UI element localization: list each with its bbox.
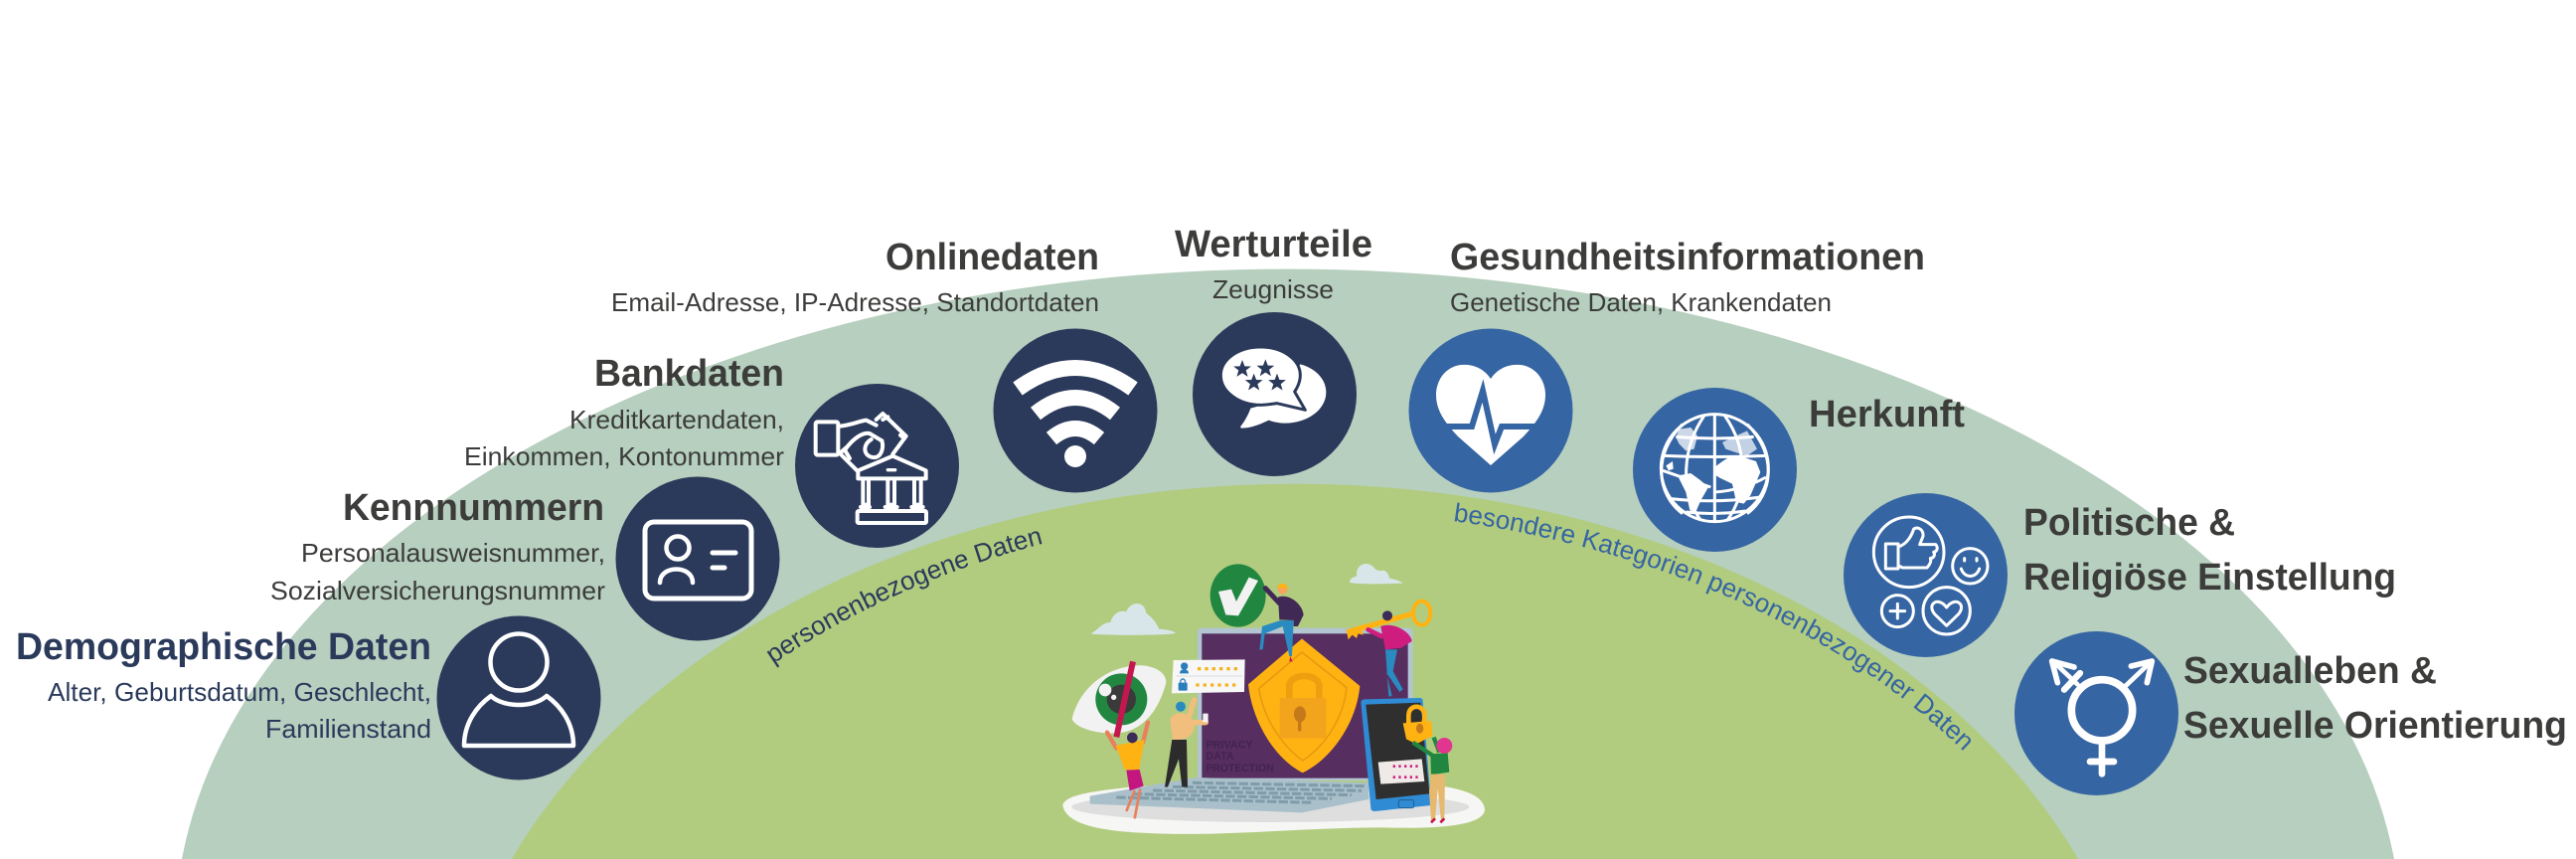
phone [1361, 698, 1431, 811]
heading block: Bankdaten: Einkommen, Kontonummer [464, 441, 784, 471]
heading block: Bankdaten: Bankdaten [594, 353, 784, 395]
ground shadow [1071, 791, 1469, 822]
small padlock [1403, 707, 1433, 744]
heading block: Demographische Daten: Familienstand [265, 714, 431, 744]
heading block: Werturteile: Werturteile [1175, 224, 1372, 265]
figure: woman with eye [1107, 723, 1148, 818]
golden key [1347, 601, 1430, 639]
heading block: Demographische Daten: Demographische Daten [16, 626, 431, 668]
figure: man on laptop [1259, 584, 1304, 661]
heading block: Bankdaten [464, 353, 784, 471]
icon: person [437, 616, 600, 779]
outer arc: besondere Kategorien and personal data band [182, 269, 2394, 859]
heading block: Kennnummern [270, 487, 605, 605]
heading block: Gesundheitsinformationen [1450, 237, 1925, 317]
heading block: Gesundheitsinformationen: Gesundheitsinformationen [1450, 237, 1925, 278]
figure: person with key [1368, 610, 1412, 697]
heading block: Sexualleben & Sexuelle Orientierung: Sexuelle Orientierung [2183, 705, 2567, 747]
heading block: Politische & Religiöse Einstellung: Religiöse Einstellung [2023, 557, 2396, 599]
heading block: Werturteile [1175, 224, 1372, 304]
curved label: besondere Kategorien personenbezogener Daten: besondere Kategorien personenbezogener Daten [1455, 503, 1971, 751]
icon: wifi [994, 328, 1157, 493]
curved label: personenbezogene Daten: personenbezogene Daten [767, 531, 1042, 668]
heading block: Demographische Daten [16, 626, 431, 744]
heading block: Sexualleben & Sexuelle Orientierung: Sexualleben & [2183, 650, 2437, 692]
figure: woman with padlock [1413, 738, 1452, 822]
heading block: Sexualleben & Sexuelle Orientierung [2183, 650, 2567, 747]
heading block: Politische & Religiöse Einstellung [2023, 502, 2396, 599]
heading: Herkunft: Herkunft [1809, 394, 1965, 435]
heading block: Politische & Religiöse Einstellung: Politische & [2023, 502, 2235, 544]
icon: heart with pulse [1409, 328, 1572, 493]
login card [1172, 659, 1245, 693]
heading block: Onlinedaten: Email-Adresse, IP-Adresse, Standortdaten [611, 287, 1099, 317]
ground blob [1062, 786, 1485, 834]
icon: globe [1633, 388, 1797, 552]
icon: thumb up, smile, plus, heart [1844, 493, 2008, 657]
screen text [1206, 739, 1274, 774]
icon: transgender symbol [2014, 631, 2178, 795]
keyboard [1090, 777, 1368, 812]
eye [1072, 665, 1166, 733]
laptop screen [1198, 628, 1413, 780]
heading block: Kennnummern: Sozialversicherungsnummer [270, 576, 605, 605]
icon: speech bubbles with stars [1193, 312, 1357, 476]
heading block: Gesundheitsinformationen: Genetische Daten, Krankendaten [1450, 287, 1832, 317]
heading block: Kennnummern: Personalausweisnummer, [301, 538, 605, 568]
green checkmark badge [1210, 564, 1266, 627]
heading block: Bankdaten: Kreditkartendaten, [569, 405, 784, 434]
inner arc [512, 484, 2078, 859]
screen text: DATA [1206, 751, 1234, 763]
heading block: Werturteile: Zeugnisse [1212, 274, 1334, 304]
heading block: Kennnummern: Kennnummern [343, 487, 604, 529]
screen text: PROTECTION [1206, 763, 1274, 774]
shield with padlock [1248, 638, 1360, 773]
illustration: data protection scene [1062, 564, 1485, 834]
icon: hand with money over bank [795, 384, 959, 548]
clouds [1090, 564, 1403, 635]
icon: ID card [616, 477, 779, 640]
heading block: Onlinedaten: Onlinedaten [886, 237, 1099, 278]
heading block: Onlinedaten [611, 237, 1099, 317]
figure: man with phone [1165, 700, 1208, 787]
screen text: PRIVACY [1206, 739, 1253, 751]
heading block: Demographische Daten: Alter, Geburtsdatum, Geschlecht, [48, 677, 431, 707]
